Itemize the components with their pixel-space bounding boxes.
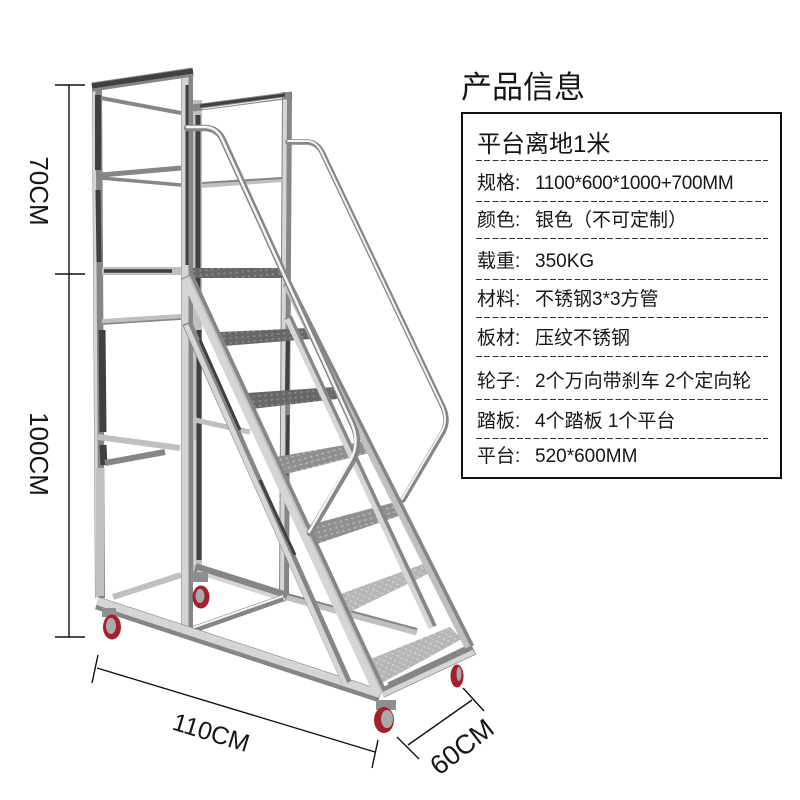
back tower frame bbox=[193, 92, 292, 597]
row: material: 不锈钢3*3方管 bbox=[535, 289, 659, 310]
label: 60CM: 60CM bbox=[424, 713, 500, 781]
ladder right stringers bbox=[286, 283, 470, 648]
dimension: length line bbox=[92, 655, 378, 768]
platform tread bbox=[193, 268, 284, 278]
row: specification: 规格: bbox=[477, 173, 520, 194]
row: material bbox=[477, 288, 659, 310]
caster: back bbox=[191, 572, 210, 608]
base frame front rails bbox=[97, 601, 474, 696]
row: colour: 颜色: bbox=[477, 210, 520, 231]
row: wheels: 轮子: bbox=[477, 371, 520, 392]
row: plate: 压纹不锈钢 bbox=[535, 328, 630, 349]
ladder left stringers bbox=[185, 276, 382, 694]
label: 100CM: 100CM bbox=[24, 412, 54, 496]
caster: front left bbox=[102, 608, 121, 640]
treads bbox=[220, 328, 462, 684]
title: 产品信息 bbox=[461, 70, 585, 105]
row: load: 350KG bbox=[535, 251, 594, 272]
row: platform: 平台: bbox=[477, 446, 520, 467]
row: wheels: 2个万向带刹车 2个定向轮 bbox=[535, 371, 751, 392]
label: 70CM: 70CM bbox=[24, 156, 54, 226]
row: load bbox=[477, 251, 594, 272]
row: colour: 银色（不可定制） bbox=[535, 210, 687, 231]
row: platform bbox=[477, 446, 637, 467]
row: treads: 4个踏板 1个平台 bbox=[535, 411, 675, 432]
handrail: left bbox=[187, 127, 357, 533]
row: material: 材料: bbox=[477, 289, 520, 310]
dimension: width line bbox=[397, 688, 484, 759]
row: treads: 踏板: bbox=[477, 411, 520, 432]
row: plate: 板材: bbox=[477, 328, 520, 349]
caster: front right bbox=[374, 700, 396, 733]
row: platform: 520*600MM bbox=[535, 446, 637, 467]
handrail: right bbox=[288, 141, 446, 500]
row: load: 载重: bbox=[477, 251, 520, 272]
ladder illustration bbox=[92, 71, 474, 733]
left tower frame bbox=[92, 71, 193, 630]
row: specification: 1100*600*1000+700MM bbox=[535, 173, 733, 194]
row: plate bbox=[477, 328, 630, 349]
base frame back rails bbox=[113, 568, 417, 632]
label: 110CM: 110CM bbox=[169, 708, 253, 758]
caster: rear right bbox=[450, 664, 464, 688]
panel: product specifications bbox=[461, 112, 782, 479]
dimension: vertical height lines bbox=[55, 85, 85, 637]
panel heading: 平台离地1米 bbox=[477, 131, 610, 158]
